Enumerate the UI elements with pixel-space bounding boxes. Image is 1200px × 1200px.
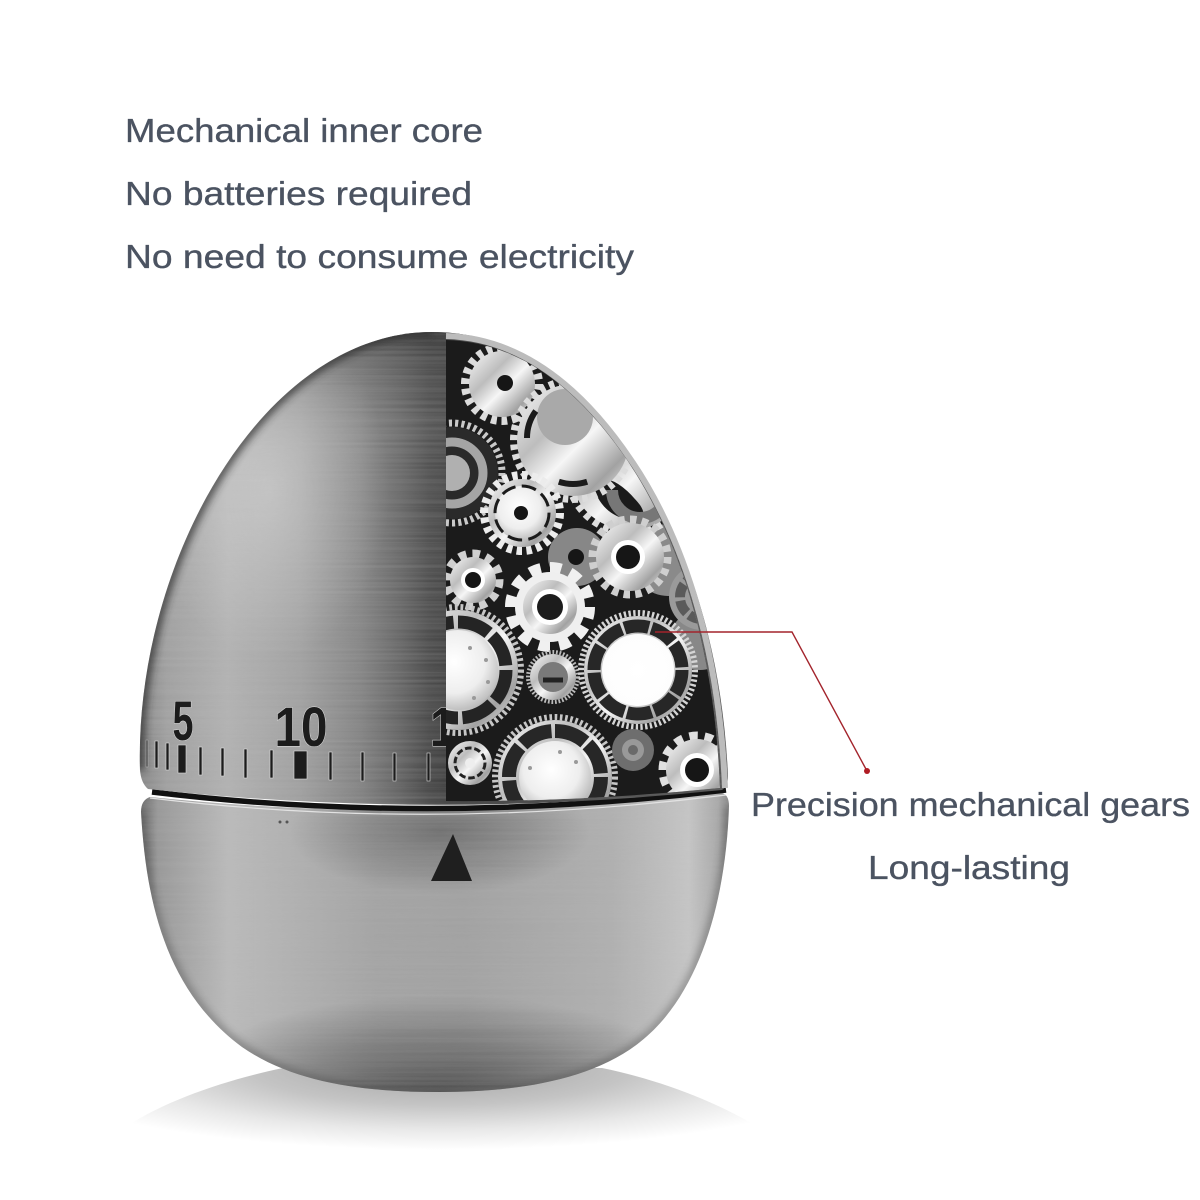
number 10: 10 [274,695,328,758]
text block: mechanical features: No batteries required [125,175,472,212]
gear: right edge dark [669,571,699,630]
pointer triangle [431,834,472,881]
number 5: 5 [172,689,194,752]
ground shadow [100,1068,790,1150]
gear: bottom grey [612,729,654,771]
gear: right background grey [644,524,708,670]
callout: precision gears: Long-lasting [868,849,1070,886]
gear: top left [466,348,538,420]
dial ticks [146,740,430,781]
gear: upper large [515,382,631,498]
gear: large left [446,604,524,736]
text block: mechanical features: No need to consume electricity [125,238,635,275]
upper body [130,320,740,810]
gear: upper right [570,416,664,532]
number 15 partially covered: 1 [430,695,456,758]
callout: precision gears [751,786,1190,886]
gear: centre grey [548,528,606,586]
gear: bottom small left [448,741,492,785]
gear: centre hub [512,569,588,645]
gear: upper left dark ring [446,420,506,526]
gear: bottom right hub [658,732,720,793]
leader line to gears [655,632,870,774]
callout: precision gears: Precision mechanical gears [751,786,1190,823]
gear: large bright [581,613,695,727]
gear: small left hub [447,554,499,606]
gear: upper right hub [593,520,667,594]
gear: dashed ring [485,476,559,550]
lower body [141,793,729,1092]
text block: mechanical features: Mechanical inner core [125,112,483,149]
gear: small centre [528,652,578,702]
panel: exposed gears [446,340,720,802]
groove between halves [150,790,726,814]
egg timer illustration [140,332,729,1092]
text block: mechanical features [125,112,635,275]
rim highlight [446,336,725,788]
gear: bottom centre [492,714,618,801]
